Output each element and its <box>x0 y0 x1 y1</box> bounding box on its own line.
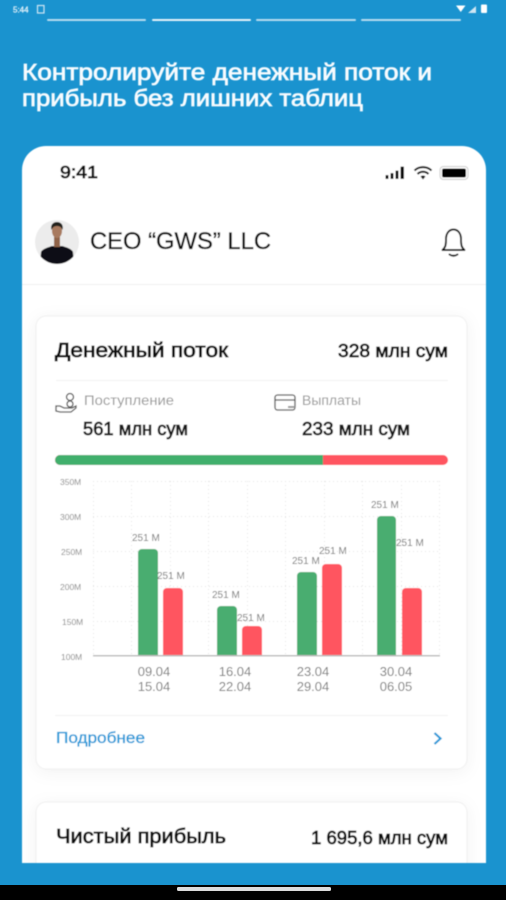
bar value labels <box>132 500 424 624</box>
x axis date labels: 09.04 <box>138 664 170 679</box>
chart grid <box>93 481 440 655</box>
system status bar <box>13 4 487 14</box>
phone status bar <box>60 162 468 182</box>
x axis date labels <box>138 666 412 692</box>
bar value labels: 251 M <box>396 538 424 549</box>
net profit heading: Чистый прибыль <box>56 826 226 848</box>
bar value labels: 251 M <box>212 590 240 601</box>
bar value labels: 251 M <box>132 533 160 544</box>
avatar <box>35 220 79 264</box>
navigation bar <box>0 885 506 900</box>
y axis labels <box>60 477 83 662</box>
progress split bar <box>55 455 448 465</box>
story progress bars <box>47 19 461 21</box>
green bars <box>138 516 396 656</box>
payouts value: 233 млн сум <box>302 419 410 439</box>
system status bar: 5:44 <box>13 6 29 14</box>
account name: CEO “GWS” LLC <box>90 228 271 255</box>
x axis date labels: 29.04 <box>297 679 329 694</box>
title: Контролируйте денежный поток и <box>22 59 432 85</box>
red bars <box>163 564 422 656</box>
bar value labels: 251 M <box>237 613 265 624</box>
bar value labels: 251 M <box>292 556 320 567</box>
bar value labels: 251 M <box>157 571 185 582</box>
y axis labels: 200M <box>60 582 81 592</box>
icon: payment card <box>275 395 295 410</box>
y axis labels: 250M <box>61 547 82 557</box>
y axis labels: 100M <box>61 652 82 662</box>
x axis date labels: 06.05 <box>380 679 412 694</box>
cash flow total: 328 млн сум <box>338 341 448 361</box>
net profit value: 1 695,6 млн сум <box>311 828 448 848</box>
x axis date labels: 16.04 <box>219 664 251 679</box>
income value: 561 млн сум <box>83 419 188 439</box>
x axis date labels: 22.04 <box>219 679 251 694</box>
x axis date labels: 15.04 <box>138 679 170 694</box>
title <box>22 59 432 111</box>
y axis labels: 350M <box>60 477 81 487</box>
bar value labels: 251 M <box>371 500 399 511</box>
cash flow heading: Денежный поток <box>55 340 228 362</box>
bar chart <box>60 477 440 694</box>
y axis labels: 300M <box>60 512 81 522</box>
phone panel <box>22 146 486 900</box>
title: прибыль без лишних таблиц <box>22 85 363 111</box>
phone status bar: 9:41 <box>60 162 98 182</box>
icon: bell <box>442 230 464 256</box>
income label: Поступление <box>84 393 174 408</box>
panel: net profit card <box>35 802 468 862</box>
x axis date labels: 23.04 <box>297 664 329 679</box>
panel: cash flow card <box>36 316 467 769</box>
payouts label: Выплаты <box>302 393 361 408</box>
icon: income hand <box>56 394 76 412</box>
details link: Подробнее <box>56 730 145 747</box>
icon: chevron <box>434 733 440 744</box>
x axis date labels: 30.04 <box>380 664 412 679</box>
bar value labels: 251 M <box>319 546 347 557</box>
y axis labels: 150M <box>62 617 83 627</box>
